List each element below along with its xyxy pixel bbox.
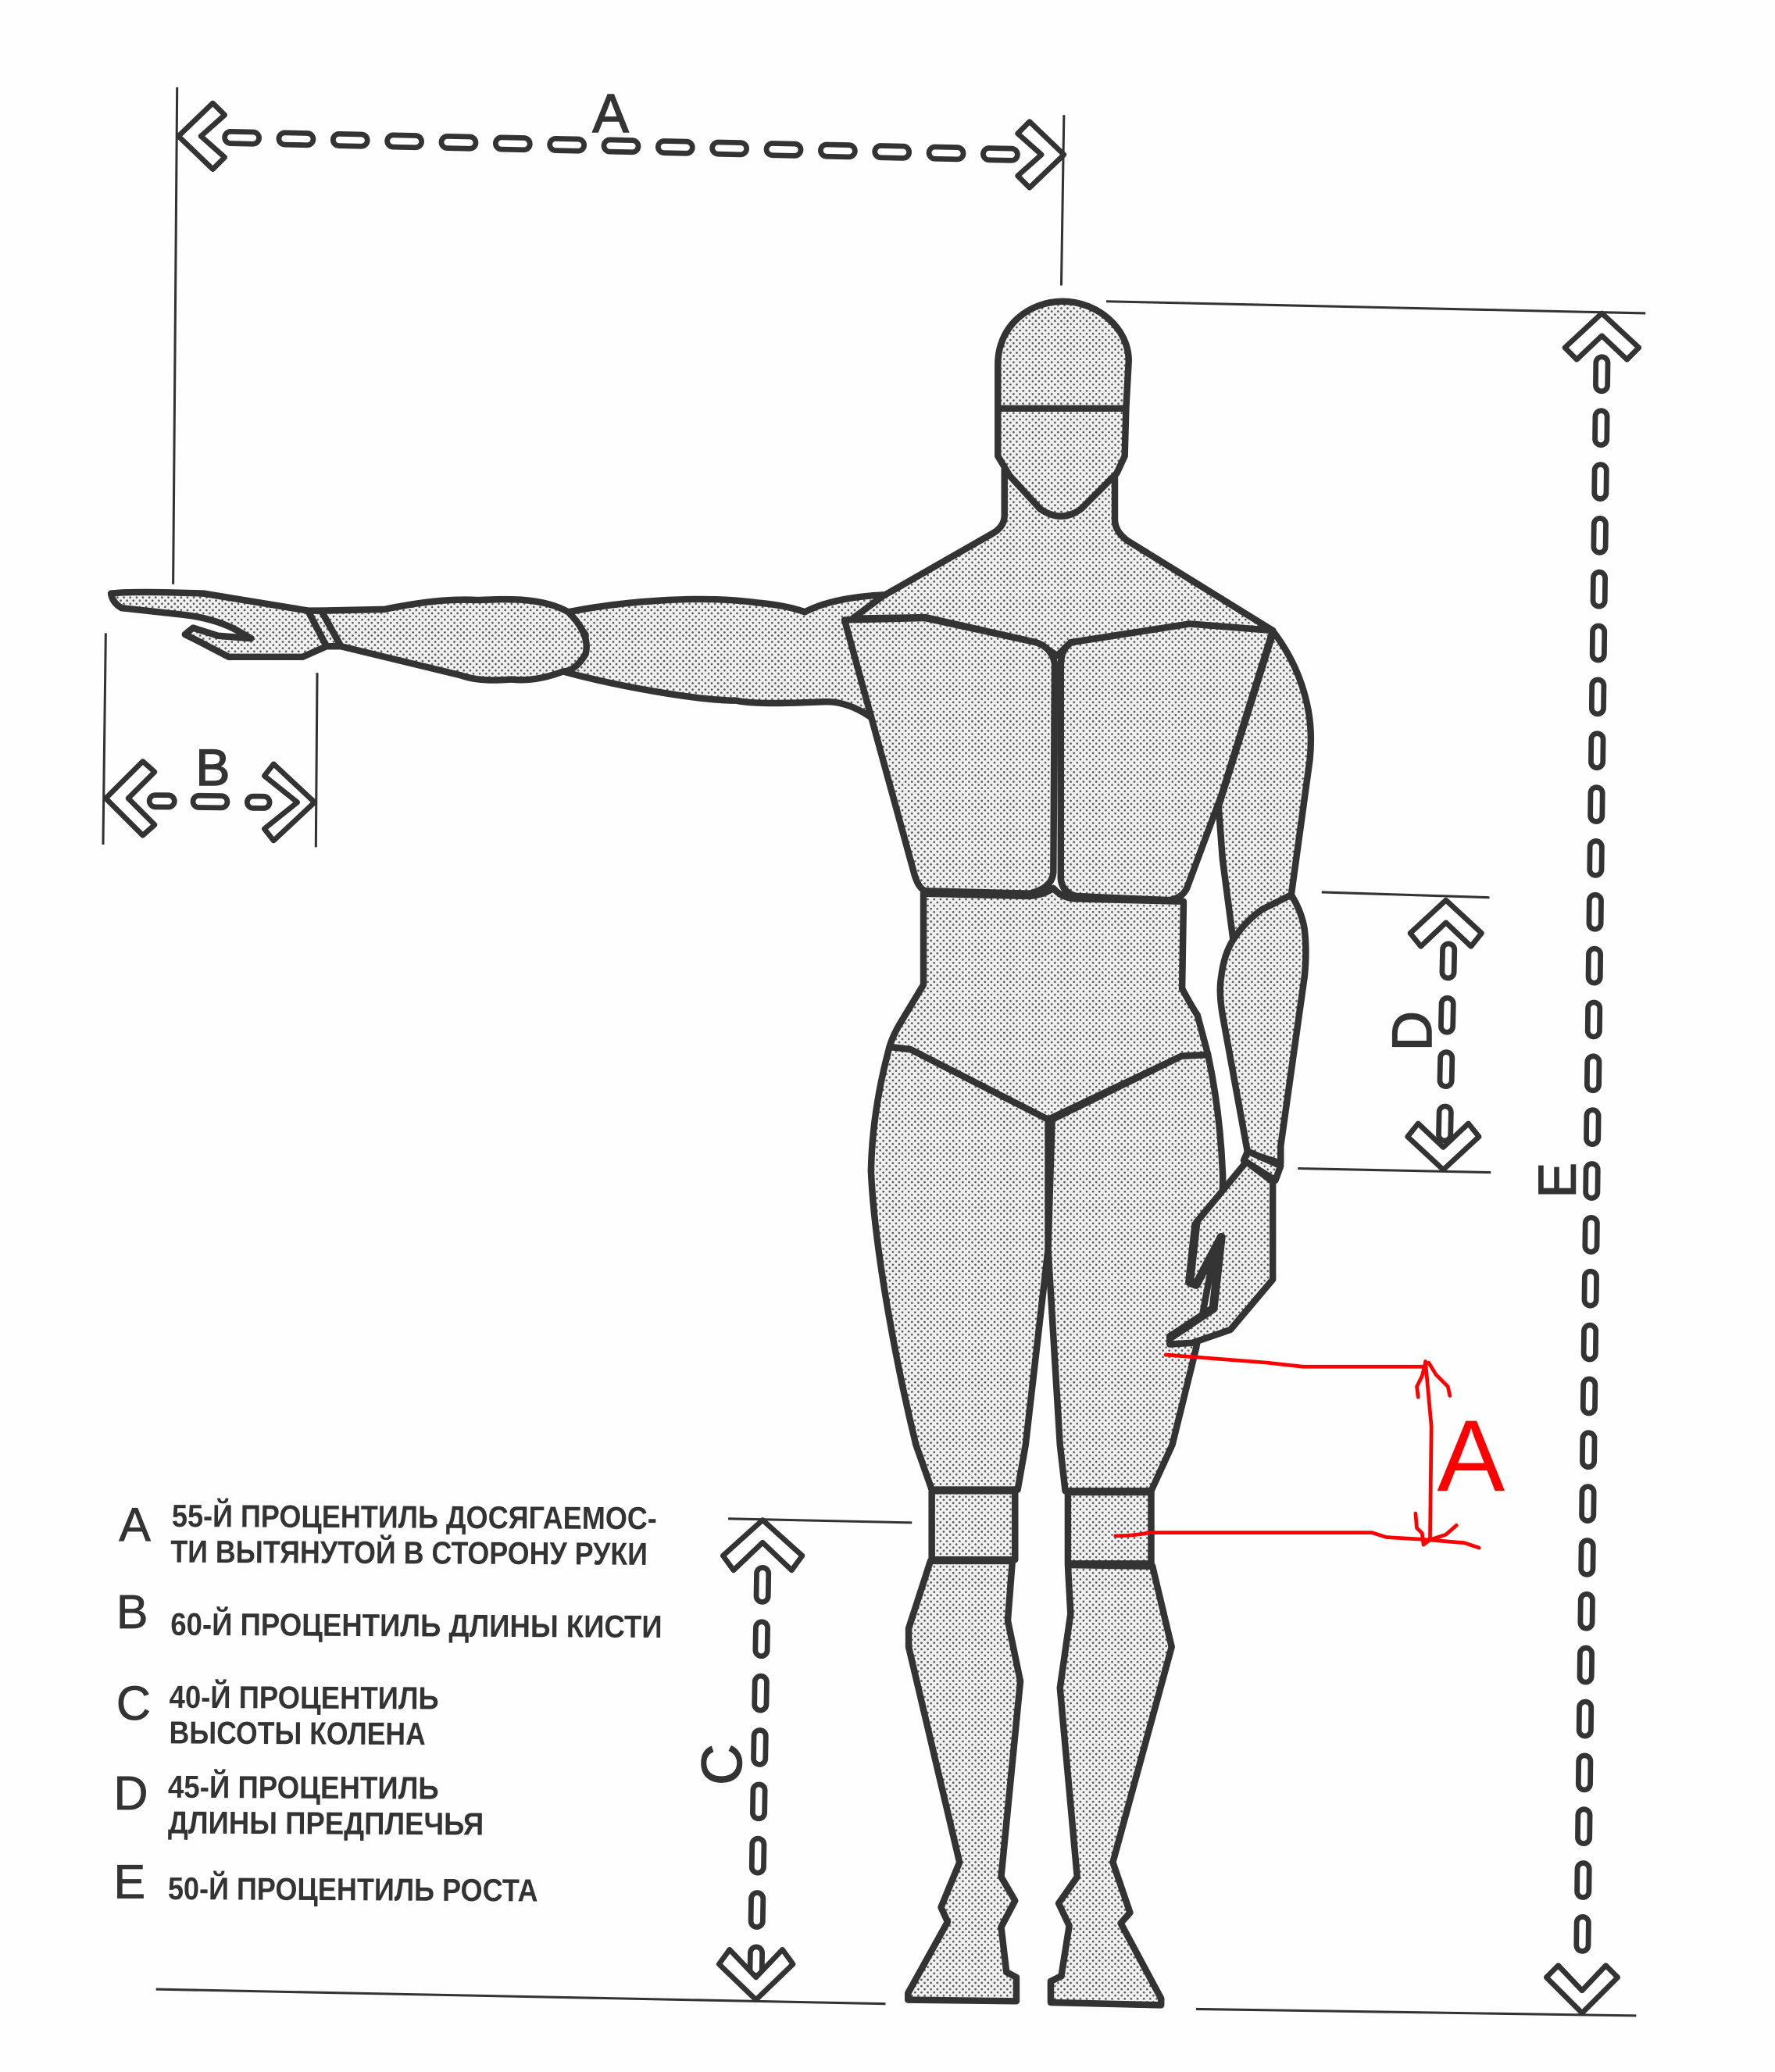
legend item A: A xyxy=(119,1499,151,1552)
left thigh xyxy=(871,1047,1048,1490)
legend item C: C xyxy=(116,1677,151,1730)
legend item B: B xyxy=(116,1585,148,1638)
legend item D: 45-Й ПРОЦЕНТИЛЬ xyxy=(168,1769,439,1806)
dimension arrow D: D xyxy=(1382,1011,1444,1051)
legend item E: 50-Й ПРОЦЕНТИЛЬ РОСТА xyxy=(168,1870,538,1909)
dimension arrow B: B xyxy=(195,738,230,796)
hanging hand xyxy=(1170,1162,1273,1345)
head xyxy=(998,302,1129,516)
legend item D: ДЛИНЫ ПРЕДПЛЕЧЬЯ xyxy=(168,1804,484,1842)
hanging arm xyxy=(1219,632,1311,1181)
hand-drawn red measurement A xyxy=(1116,1355,1505,1548)
dimension arrow B xyxy=(105,738,315,841)
legend item D: D xyxy=(113,1767,148,1820)
right shin and foot xyxy=(1051,1565,1172,2005)
dimension arrow C: C xyxy=(691,1744,754,1785)
dimension arrow C xyxy=(691,1520,802,2000)
legend item C: 40-Й ПРОЦЕНТИЛЬ xyxy=(169,1679,439,1717)
legend item D xyxy=(113,1767,484,1842)
knees xyxy=(932,1491,1152,1563)
legend item E: E xyxy=(113,1855,145,1908)
legend item E xyxy=(113,1855,538,1909)
dimension arrow A xyxy=(178,83,1064,188)
legend item A xyxy=(119,1498,657,1572)
legend item B: 60-Й ПРОЦЕНТИЛЬ ДЛИНЫ КИСТИ xyxy=(170,1606,662,1645)
dimension arrow A: A xyxy=(592,83,629,144)
dimension arrow D xyxy=(1382,900,1481,1170)
hand-drawn red measurement A: A xyxy=(1437,1399,1505,1513)
dimension arrow E: E xyxy=(1529,1163,1588,1198)
legend xyxy=(113,1498,662,1909)
left shin and foot xyxy=(908,1561,1020,2001)
outstretched arm xyxy=(111,592,884,716)
legend item C: ВЫСОТЫ КОЛЕНА xyxy=(169,1714,426,1752)
abdomen xyxy=(890,888,1208,1120)
dimension arrow E xyxy=(1529,313,1639,2013)
neck and shoulders xyxy=(852,470,1273,656)
right thigh xyxy=(1048,1055,1223,1491)
legend item C xyxy=(116,1677,439,1752)
human figure xyxy=(111,302,1311,2005)
legend item A: 55-Й ПРОЦЕНТИЛЬ ДОСЯГАЕМОС- xyxy=(172,1498,657,1536)
chest xyxy=(845,618,1273,900)
legend item A: ТИ ВЫТЯНУТОЙ В СТОРОНУ РУКИ xyxy=(170,1534,648,1572)
legend item B xyxy=(116,1585,662,1645)
